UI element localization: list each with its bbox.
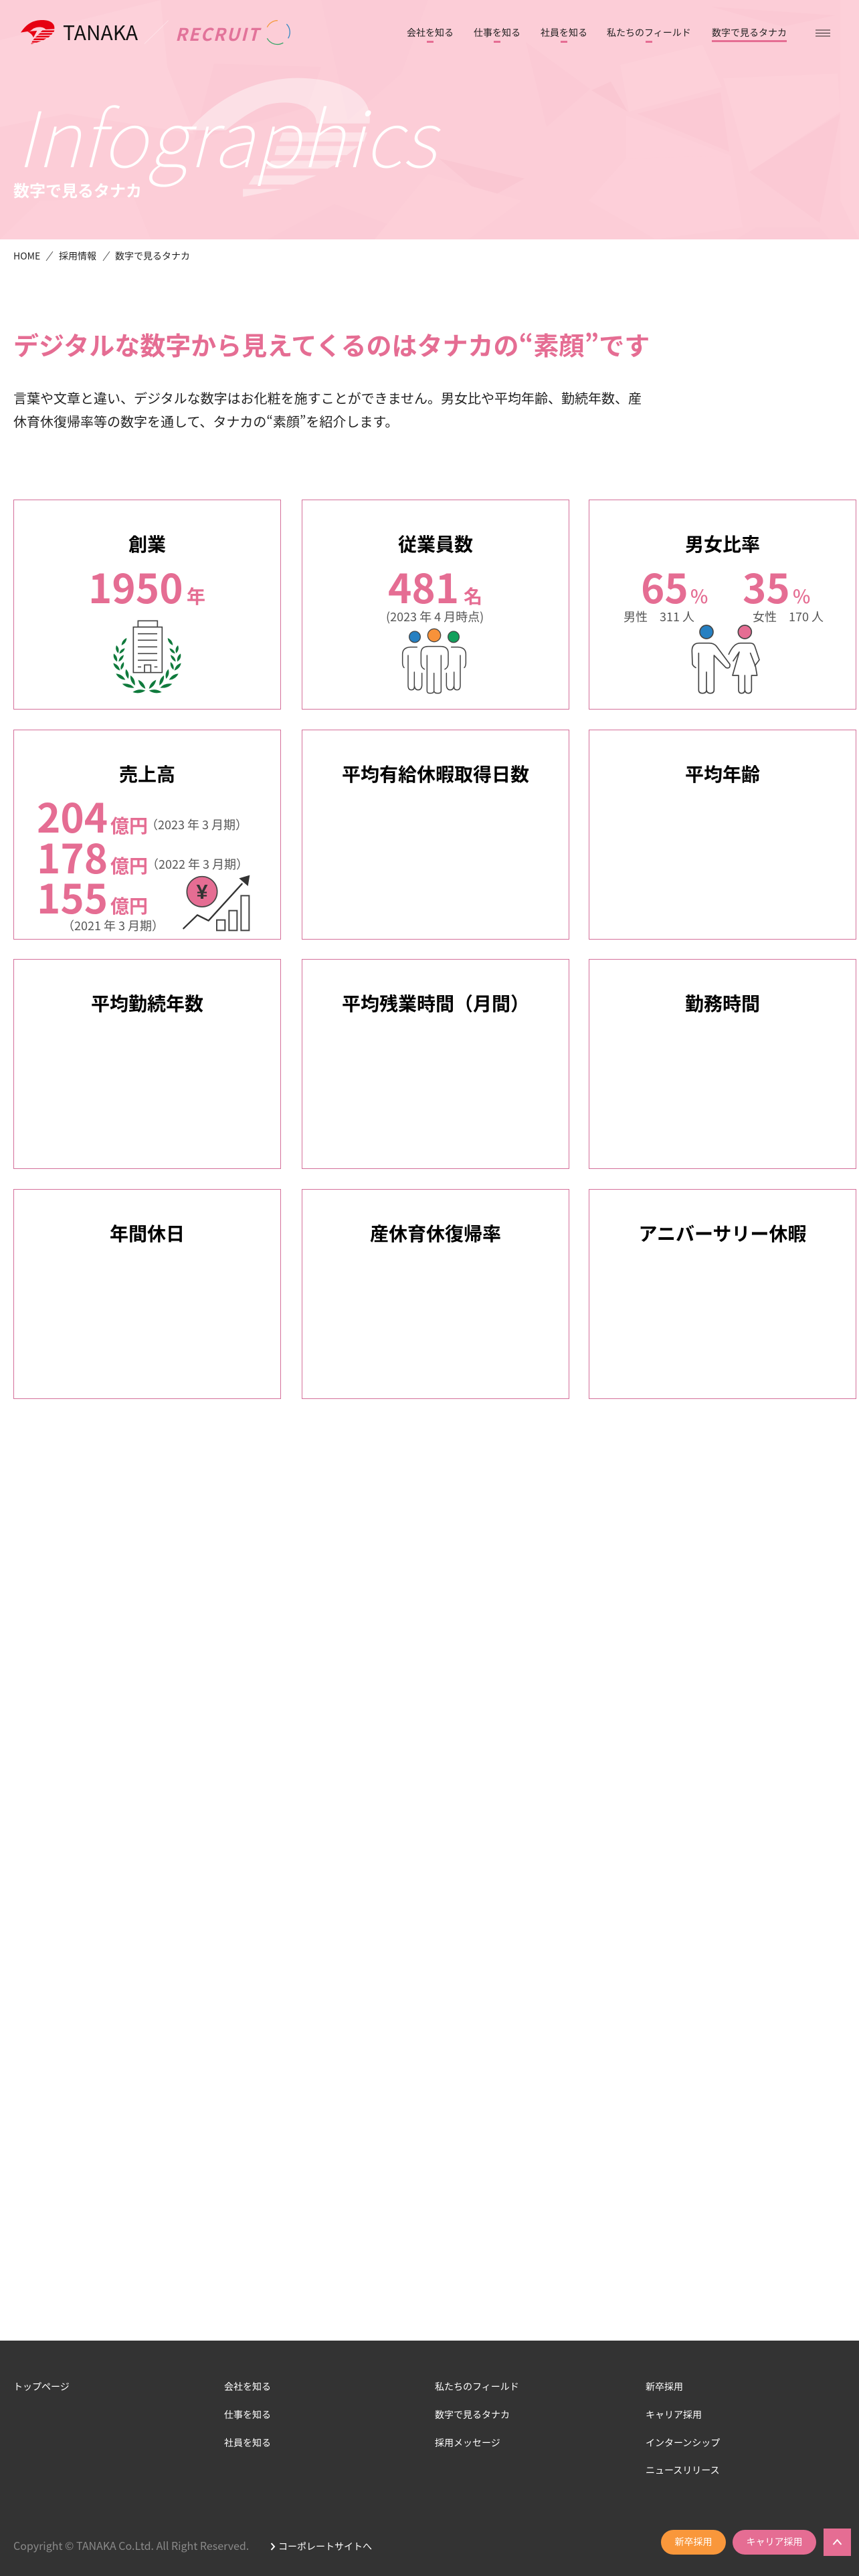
heading: 平均年齢 bbox=[685, 760, 760, 787]
button: back to top bbox=[824, 2529, 851, 2556]
note: (2023 年 4 月時点) bbox=[386, 608, 484, 625]
unit: % bbox=[690, 582, 708, 609]
footer link: 社員を知る bbox=[224, 2436, 271, 2450]
unit: % bbox=[793, 582, 810, 609]
site logo bbox=[21, 17, 290, 46]
nav item: 社員を知る bbox=[541, 26, 587, 39]
copyright: Copyright © TANAKA Co.Ltd. All Right Reserved. bbox=[13, 2537, 249, 2553]
footer link: 私たちのフィールド bbox=[435, 2380, 519, 2393]
heading: 男女比率 bbox=[685, 530, 760, 557]
footer bbox=[0, 2341, 859, 2576]
icon: yen growth chart bbox=[183, 875, 250, 931]
breadcrumb: HOME bbox=[13, 249, 40, 263]
nav item: 仕事を知る bbox=[474, 26, 520, 39]
icon: menu bbox=[816, 29, 830, 36]
breadcrumb bbox=[13, 249, 190, 263]
value 2021: 155 bbox=[37, 867, 108, 926]
panel: average age bbox=[589, 730, 856, 940]
panel: working hours bbox=[589, 959, 856, 1169]
unit: 億円 bbox=[110, 852, 148, 879]
intro text: 休育休復帰率等の数字を通して、タナカの“素顔”を紹介します。 bbox=[13, 411, 398, 431]
page heading: デジタルな数字から見えてくるのはタナカの“素顔”です bbox=[13, 326, 650, 362]
heading: 産休育休復帰率 bbox=[370, 1220, 501, 1247]
female value: 35 bbox=[743, 557, 790, 615]
logotype: TANAKA bbox=[63, 17, 138, 46]
intro text: 言葉や文章と違い、デジタルな数字はお化粧を施すことができません。男女比や平均年齢、勤続年数、産 bbox=[13, 388, 642, 407]
panel: overtime bbox=[302, 959, 569, 1169]
recruit label: RECRUIT bbox=[175, 21, 260, 46]
footer link: インターンシップ bbox=[646, 2436, 720, 2450]
footer link: 数字で見るタナカ bbox=[435, 2408, 510, 2422]
panel: tenure bbox=[13, 959, 281, 1169]
note: （2022 年 3 月期） bbox=[147, 855, 248, 873]
button: new graduate bbox=[661, 2530, 726, 2555]
footer link: 採用メッセージ bbox=[435, 2436, 500, 2450]
footer link: キャリア採用 bbox=[646, 2408, 702, 2422]
icon: building with laurel bbox=[113, 621, 181, 693]
heading: 平均残業時間（月間） bbox=[342, 990, 529, 1016]
note: （2021 年 3 月期） bbox=[62, 917, 164, 934]
corporate site link: コーポレートサイトへ bbox=[278, 2540, 372, 2553]
footer link: 仕事を知る bbox=[224, 2408, 271, 2422]
footer link: 新卒採用 bbox=[646, 2380, 683, 2393]
value: 1950 bbox=[88, 557, 183, 615]
panel: annual holidays bbox=[13, 1189, 281, 1399]
value 2022: 178 bbox=[37, 827, 108, 885]
heading: 平均勤続年数 bbox=[91, 990, 203, 1016]
unit: 億円 bbox=[110, 892, 148, 919]
ghost logo watermark bbox=[189, 78, 370, 197]
panel: paid leave bbox=[302, 730, 569, 940]
heading: 創業 bbox=[128, 530, 166, 557]
heading: 平均有給休暇取得日数 bbox=[342, 760, 529, 787]
value: 481 bbox=[388, 557, 459, 615]
intro text bbox=[13, 388, 642, 431]
heading: 従業員数 bbox=[398, 530, 473, 557]
icon: couple bbox=[692, 625, 760, 694]
unit: 億円 bbox=[110, 812, 148, 839]
icon: yen growth chart: ¥ bbox=[196, 881, 208, 903]
breadcrumb: 数字で見るタナカ bbox=[115, 249, 190, 263]
panel: gender ratio bbox=[589, 500, 856, 710]
button: career bbox=[733, 2530, 816, 2555]
nav item: 会社を知る bbox=[407, 26, 454, 39]
panel: sales bbox=[13, 730, 281, 940]
panel: anniversary leave bbox=[589, 1189, 856, 1399]
footer link: 会社を知る bbox=[224, 2380, 271, 2393]
male value: 65 bbox=[641, 557, 688, 615]
nav item active: 数字で見るタナカ bbox=[712, 26, 787, 39]
heading: 勤務時間 bbox=[685, 990, 760, 1016]
nav item: 私たちのフィールド bbox=[607, 26, 691, 39]
hero title: Infographics bbox=[16, 79, 441, 190]
female count: 女性 170 人 bbox=[753, 608, 824, 625]
footer link: ニュースリリース bbox=[646, 2464, 720, 2477]
footer link: トップページ bbox=[13, 2380, 70, 2393]
heading: 売上高 bbox=[119, 760, 175, 787]
icon: tanaka mark bbox=[21, 20, 290, 45]
panel: employees bbox=[302, 500, 569, 710]
hero banner bbox=[0, 0, 859, 239]
male count: 男性 311 人 bbox=[624, 608, 694, 625]
note: （2023 年 3 月期） bbox=[146, 816, 248, 833]
button: career: キャリア採用 bbox=[747, 2535, 803, 2549]
button: new graduate: 新卒採用 bbox=[674, 2535, 712, 2549]
heading: アニバーサリー休暇 bbox=[639, 1220, 806, 1247]
heading: 年間休日 bbox=[110, 1220, 185, 1247]
panel: founding bbox=[13, 500, 281, 710]
icon: three people bbox=[401, 629, 467, 694]
value 2023: 204 bbox=[37, 786, 108, 845]
hero subtitle: 数字で見るタナカ bbox=[13, 178, 142, 201]
breadcrumb: 採用情報 bbox=[59, 249, 96, 263]
unit: 名 bbox=[464, 582, 482, 609]
navigation bbox=[407, 26, 830, 43]
panel: parental leave return rate bbox=[302, 1189, 569, 1399]
unit: 年 bbox=[187, 582, 205, 609]
